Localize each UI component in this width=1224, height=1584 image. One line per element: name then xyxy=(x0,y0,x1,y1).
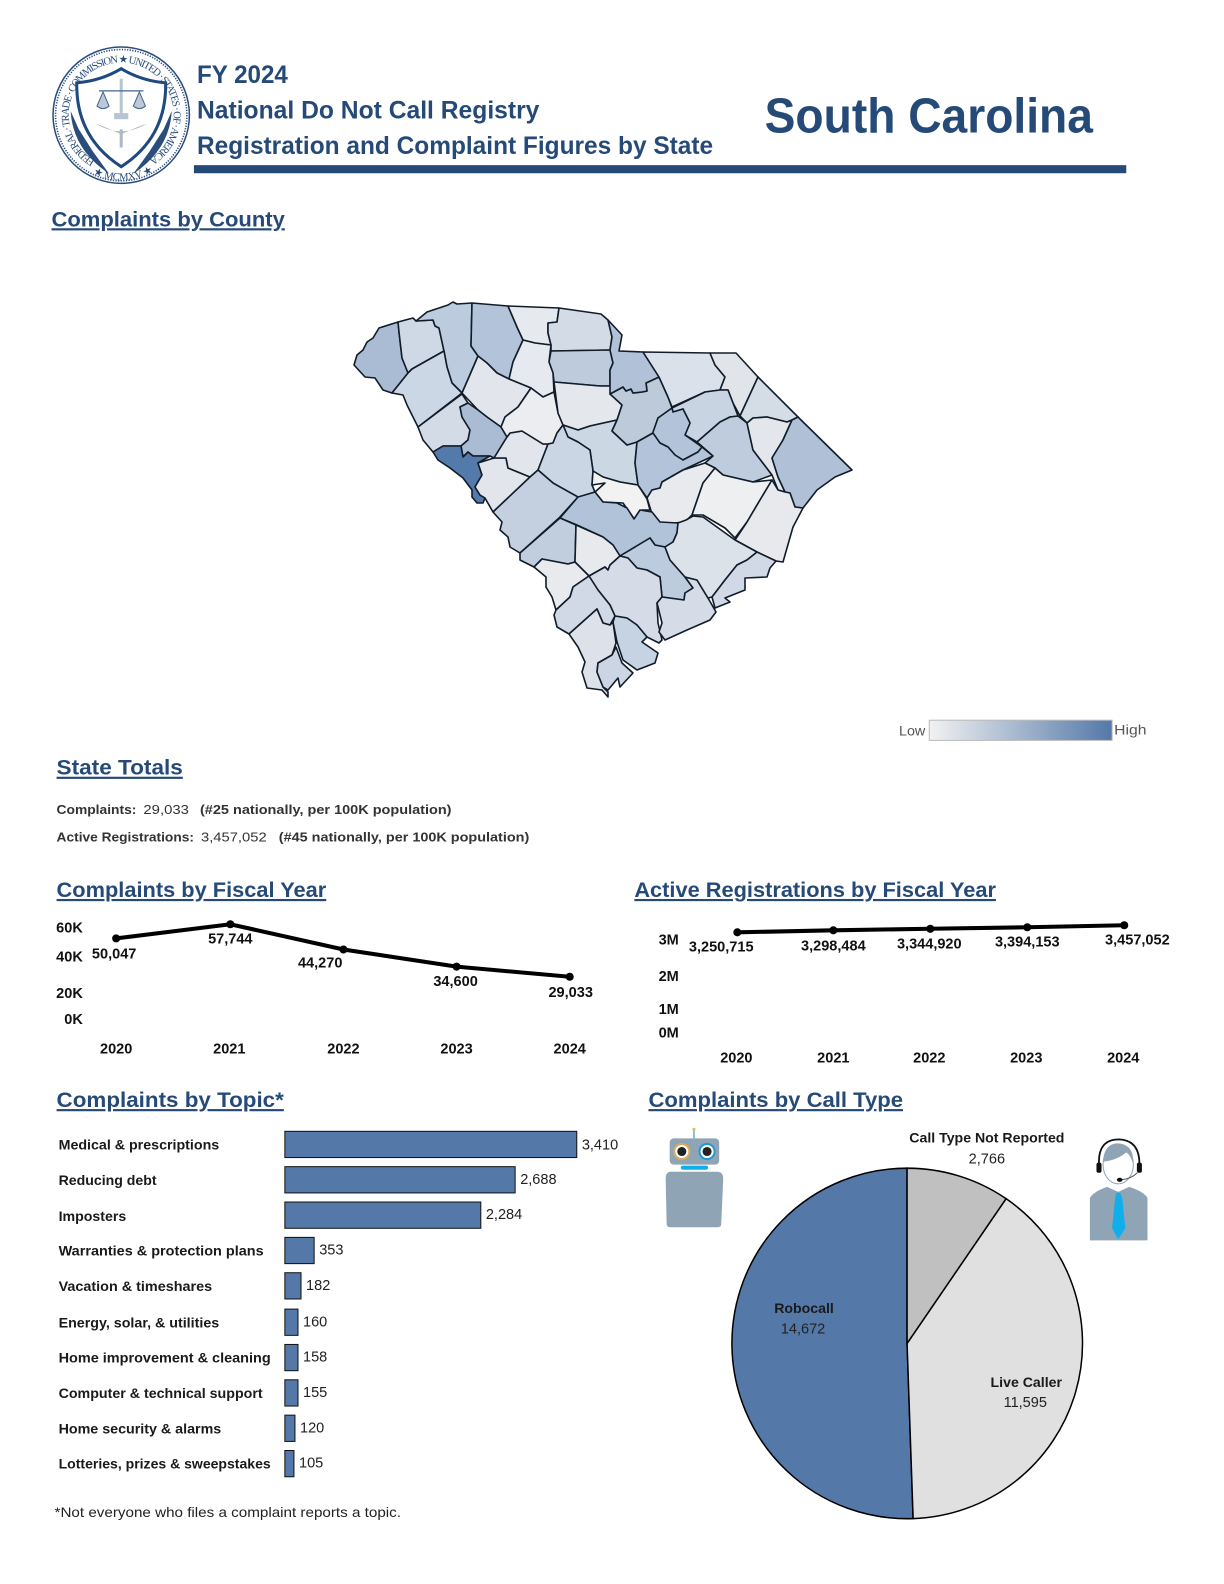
icon: robot xyxy=(666,1128,723,1227)
pie chart: complaints by call type: Call Type Not Reported xyxy=(909,1129,1064,1145)
bar chart: complaints by topic: Warranties & protection plans xyxy=(59,1243,264,1259)
state totals text xyxy=(57,802,529,844)
bar chart: complaints by topic: 2,688 xyxy=(520,1172,557,1188)
line chart: active registrations by fiscal year: 2021 xyxy=(817,1051,849,1067)
state totals text: Active Registrations: xyxy=(57,829,194,844)
line chart: complaints by fiscal year: 29,033 xyxy=(548,985,593,1001)
heading: complaints by call type: Complaints by Call Type xyxy=(648,1087,903,1112)
line chart: active registrations by fiscal year: 2022 xyxy=(913,1051,945,1067)
title block: National Do Not Call Registry xyxy=(197,98,540,125)
line chart: active registrations by fiscal year: 1M xyxy=(659,1002,679,1018)
line chart: complaints by fiscal year: 20K xyxy=(56,986,83,1002)
line chart: active registrations by fiscal year: 2M xyxy=(659,969,679,985)
title block: FY 2024 xyxy=(197,62,288,89)
bar chart: complaints by topic: 120 xyxy=(300,1420,324,1436)
pie chart: complaints by call type: 14,672 xyxy=(781,1321,825,1337)
line chart: complaints by fiscal year: 44,270 xyxy=(298,956,342,972)
state totals text: (#25 nationally, per 100K population) xyxy=(200,802,452,817)
bar chart: complaints by topic: Reducing debt xyxy=(59,1172,157,1188)
line chart: active registrations by fiscal year: 2024 xyxy=(1107,1051,1139,1067)
bar chart: complaints by topic: 105 xyxy=(299,1456,323,1472)
heading: complaints by county: Complaints by County xyxy=(52,206,285,231)
title block xyxy=(197,62,713,160)
line chart: complaints by fiscal year: 2021 xyxy=(213,1042,245,1058)
bar chart: complaints by topic: 182 xyxy=(306,1278,330,1294)
line chart: active registrations by fiscal year: 3,394,153 xyxy=(995,934,1060,950)
line chart: active registrations by fiscal year: 2023 xyxy=(1010,1051,1042,1067)
bar chart: complaints by topic: 3,410 xyxy=(582,1137,618,1153)
line chart: complaints by fiscal year: 57,744 xyxy=(208,931,253,947)
line chart: active registrations by fiscal year: 3,250,715 xyxy=(689,940,754,956)
heading: complaints by fiscal year: Complaints by Fiscal Year xyxy=(57,877,327,902)
bar chart: complaints by topic: Imposters xyxy=(59,1208,126,1224)
bar chart: complaints by topic: 158 xyxy=(303,1350,327,1366)
bar chart: complaints by topic: Medical & prescriptions xyxy=(59,1136,219,1152)
bar chart: complaints by topic: Vacation & timeshares xyxy=(59,1278,212,1294)
bar chart: complaints by topic: 155 xyxy=(303,1385,327,1401)
state totals text: Complaints: xyxy=(57,802,136,817)
line chart: active registrations by fiscal year: 3,298,484 xyxy=(801,939,866,955)
pie chart: complaints by call type: 2,766 xyxy=(969,1152,1005,1168)
state name: South Carolina xyxy=(765,88,1093,143)
bar chart: complaints by topic: Home improvement & cleaning xyxy=(59,1350,271,1366)
heading: state totals: State Totals xyxy=(57,755,183,780)
line chart: complaints by fiscal year: 2022 xyxy=(327,1042,360,1058)
line chart: complaints by fiscal year: 50,047 xyxy=(92,947,136,963)
line chart: complaints by fiscal year xyxy=(56,920,593,1058)
bar chart: complaints by topic: Energy, solar, & utilities xyxy=(59,1314,219,1330)
bar chart: complaints by topic xyxy=(59,1131,618,1477)
line chart: active registrations by fiscal year: 3,344,920 xyxy=(897,936,962,952)
bar chart: complaints by topic: 2,284 xyxy=(486,1207,522,1223)
map legend: Low xyxy=(899,722,926,738)
state totals text: 3,457,052 xyxy=(201,829,267,844)
state totals text: 29,033 xyxy=(143,802,189,817)
bar chart: complaints by topic: Computer & technical support xyxy=(59,1385,263,1401)
map legend xyxy=(899,720,1146,740)
pie chart: complaints by call type xyxy=(732,1129,1083,1519)
line chart: active registrations by fiscal year: 2020 xyxy=(720,1051,753,1067)
line chart: active registrations by fiscal year: 3,457,052 xyxy=(1105,932,1170,948)
pie chart: complaints by call type: 11,595 xyxy=(1004,1395,1047,1411)
pie chart: complaints by call type: Robocall xyxy=(774,1300,834,1316)
bar chart: complaints by topic: Lotteries, prizes & sweepstakes xyxy=(59,1456,271,1472)
line chart: active registrations by fiscal year: 3M xyxy=(659,932,679,948)
line chart: complaints by fiscal year: 2023 xyxy=(440,1042,473,1058)
footnote: *Not everyone who files a complaint reports a topic. xyxy=(55,1504,401,1520)
heading: active registrations by fiscal year: Active Registrations by Fiscal Year xyxy=(634,877,997,902)
line chart: active registrations by fiscal year: 0M xyxy=(659,1025,679,1041)
state totals text: (#45 nationally, per 100K population) xyxy=(279,829,529,844)
map legend: High xyxy=(1114,721,1146,737)
line chart: complaints by fiscal year: 60K xyxy=(56,920,83,936)
line chart: complaints by fiscal year: 40K xyxy=(56,950,83,966)
icon: call center agent xyxy=(1090,1139,1147,1240)
line chart: active registrations by fiscal year xyxy=(659,921,1170,1067)
bar chart: complaints by topic: Home security & alarms xyxy=(59,1420,221,1436)
line chart: complaints by fiscal year: 2024 xyxy=(554,1042,586,1058)
title block: Registration and Complaint Figures by State xyxy=(197,133,713,160)
icon: FTC seal: ★ MCMXV ★ xyxy=(95,167,152,180)
bar chart: complaints by topic: 353 xyxy=(319,1243,343,1259)
icon: FTC seal: FEDERAL · TRADE · COMMISSION ★ UNITED · STATES · OF · AMERICA xyxy=(62,55,181,166)
line chart: complaints by fiscal year: 34,600 xyxy=(433,974,478,990)
line chart: complaints by fiscal year: 0K xyxy=(64,1012,83,1028)
pie chart: complaints by call type: Live Caller xyxy=(991,1374,1062,1390)
heading: complaints by topic: Complaints by Topic* xyxy=(57,1087,284,1112)
line chart: complaints by fiscal year: 2020 xyxy=(100,1042,132,1058)
bar chart: complaints by topic: 160 xyxy=(303,1314,327,1330)
county choropleth map xyxy=(354,302,852,697)
